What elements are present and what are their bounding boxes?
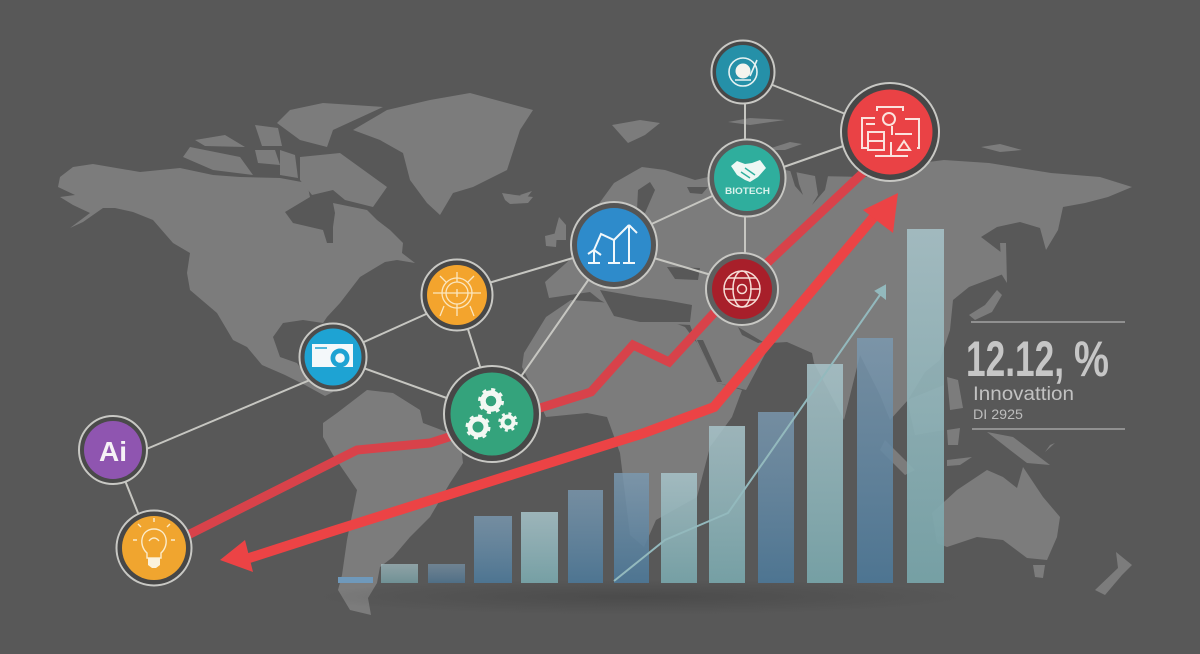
arctic islands [183, 103, 387, 207]
node: green gears [444, 366, 540, 462]
headline figure: % [1074, 331, 1109, 387]
japan and sakhalin [969, 243, 1007, 320]
node: biotech: BIOTECH [725, 186, 770, 197]
iceland [502, 193, 533, 204]
node: biotech [708, 140, 786, 216]
world map [58, 93, 1132, 615]
node: dark red globe [706, 253, 778, 325]
node: top teal icon [712, 40, 774, 104]
new guinea, tasmania, new zealand [987, 432, 1132, 595]
node: red lab icon [841, 83, 939, 181]
bar chart [338, 229, 944, 583]
node: purple Ai [79, 416, 147, 484]
innovation label: Innovattion [973, 384, 1074, 405]
date label: DI 2925 [973, 406, 1023, 422]
north america [58, 164, 415, 396]
red growth double arrow [220, 193, 898, 572]
greenland [353, 93, 533, 215]
node: purple Ai: Ai [99, 436, 127, 467]
node: blue wind turbines [571, 202, 657, 288]
australia [932, 467, 1060, 560]
node: orange light bulb [116, 510, 192, 586]
node: cyan settings window [300, 324, 366, 390]
ground shadow [310, 579, 970, 615]
thin trend arrow [614, 286, 885, 581]
africa [522, 300, 742, 547]
islands of the north [520, 118, 1022, 247]
node: orange wheel [422, 260, 492, 330]
south east asia islands [880, 377, 972, 475]
statistics callout [966, 322, 1125, 429]
network connector lines [122, 82, 853, 523]
south america [323, 390, 463, 615]
inland seas [600, 170, 828, 382]
eurasia [545, 160, 1132, 420]
red trend line through nodes [188, 170, 866, 535]
headline figure: 12.12, [966, 331, 1064, 387]
